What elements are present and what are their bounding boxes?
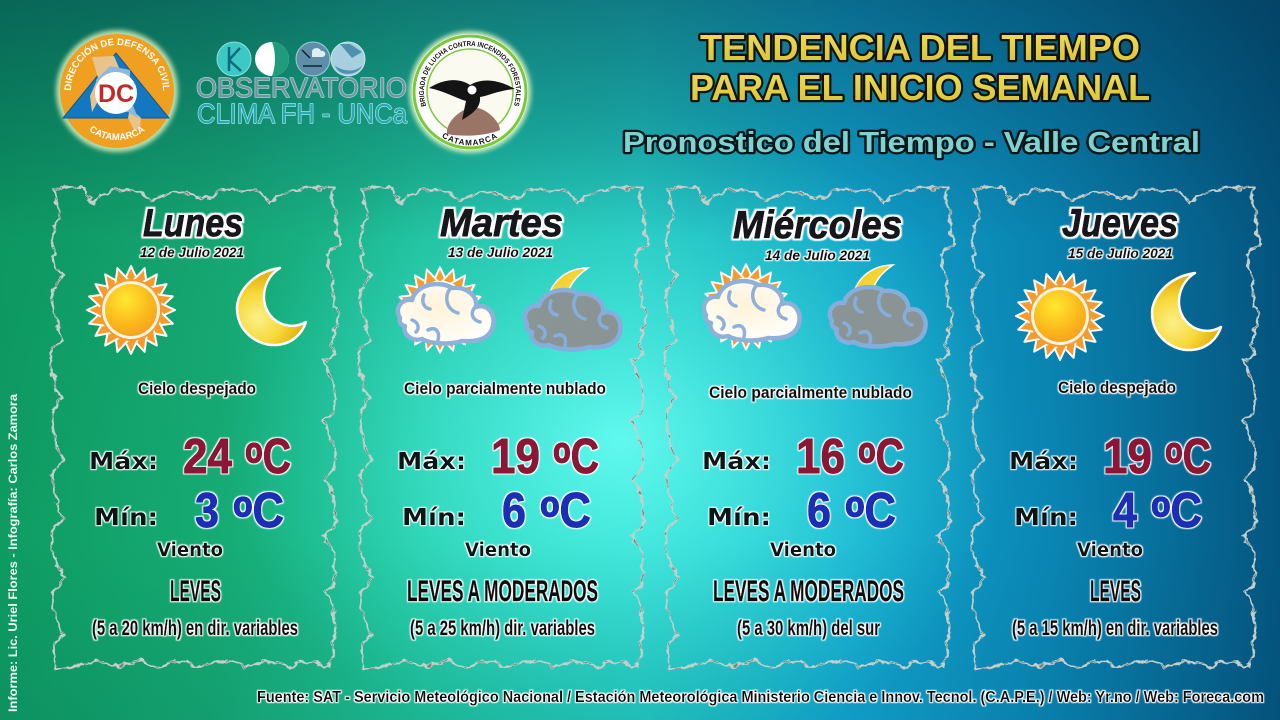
max temperature: 19 [491,430,540,484]
wind detail: (5 a 20 km/h) en dir. variables [92,617,298,640]
subtitle: Pronostico del Tiempo - Valle Central [623,127,1200,159]
date: 13 de Julio 2021 [448,244,553,260]
icon: partly cloudy night [830,265,926,346]
min temperature: 3 [195,484,219,538]
max temperature: º [858,430,876,497]
max temperature: º [1165,430,1183,497]
min temperature: º [540,484,560,551]
min temperature: 4 [1113,484,1137,538]
max temperature: 19 [1103,430,1152,484]
logo: Dirección de Defensa Civil: DC [98,80,134,108]
date: 12 de Julio 2021 [140,244,244,260]
date: 14 de Julio 2021 [765,247,870,263]
logo: Brigada de Lucha contra Incendios Forestales: BRIGADA DE LUCHA CONTRA INCENDIOS FORESTALES [419,41,521,107]
icon: sun [1016,272,1104,360]
title: TENDENCIA DEL TIEMPO [700,27,1140,68]
wind strength: LEVES [1090,575,1141,608]
max temperature: C [571,430,599,484]
max temperature: 16 [796,430,845,484]
min temperature: 6 [807,484,831,538]
panel: Lunes [51,187,340,669]
min temperature: º [845,484,865,551]
logo: Observatorio Clima FH - UNCa: CLIMA FH - UNCa [197,98,407,129]
logo: Dirección de Defensa Civil: DIRECCIÓN DE DEFENSA CIVIL [64,38,170,91]
min label: Mín: [1014,505,1078,531]
min temperature: C [865,484,896,538]
wind strength: LEVES A MODERADOS [713,575,904,608]
max temperature: C [1183,430,1211,484]
max temperature: C [263,430,291,484]
max temperature [183,430,291,497]
max temperature [1103,430,1211,497]
max label: Máx: [702,449,771,475]
logo: Dirección de Defensa Civil: CATAMARCA [90,126,145,140]
wind label: Viento [770,540,836,561]
min temperature: C [560,484,591,538]
sky condition: Cielo despejado [138,379,256,398]
icon: partly cloudy day [703,264,800,350]
logo: Observatorio Clima FH - UNCa [196,42,407,129]
min label: Mín: [94,505,158,531]
min temperature [807,484,896,551]
wind strength: LEVES A MODERADOS [407,575,598,608]
logo: Brigada de Lucha contra Incendios Forestales [406,28,534,156]
wind label: Viento [157,540,223,561]
wind label: Viento [1077,540,1143,561]
max temperature: C [876,430,904,484]
day heading: Martes [440,202,563,245]
logo: Dirección de Defensa Civil [52,26,182,156]
panel: Jueves [971,187,1260,669]
wind label: Viento [465,540,531,561]
max label: Máx: [397,449,466,475]
min temperature: 6 [502,484,526,538]
logo: Brigada de Lucha contra Incendios Forestales: CATAMARCA [442,133,498,146]
max temperature [796,430,904,497]
observatorio wordmark: OBSERVATORIO [196,72,407,103]
min temperature [502,484,591,551]
min temperature [195,484,284,551]
sky condition: Cielo parcialmente nublado [404,379,606,398]
day heading: Miércoles [733,204,902,247]
icon: moon [237,268,306,345]
max temperature: 24 [183,430,232,484]
panel: Miércoles [665,187,954,669]
icon: sun [87,266,175,354]
wind detail: (5 a 25 km/h) dir. variables [410,617,595,640]
min temperature: C [1171,484,1202,538]
wind strength: LEVES [170,575,221,608]
wind detail: (5 a 30 km/h) del sur [737,617,880,640]
max temperature: º [245,430,263,497]
title: PARA EL INICIO SEMANAL [690,67,1150,108]
max temperature [491,430,599,497]
min label: Mín: [402,505,466,531]
icon: partly cloudy day [397,267,494,353]
day heading: Jueves [1062,202,1178,245]
panel: Martes [359,187,648,669]
min temperature [1113,484,1202,551]
max label: Máx: [1009,449,1078,475]
max temperature: º [553,430,571,497]
day heading: Lunes [143,202,243,245]
min label: Mín: [707,505,771,531]
max label: Máx: [89,449,158,475]
sky condition: Cielo parcialmente nublado [709,383,912,402]
icon: moon [1152,273,1221,350]
side credit: Informe: Lic. Uriel Flores - Infografía: Carlos Zamora [6,394,20,712]
min temperature: C [253,484,284,538]
sky condition: Cielo despejado [1058,378,1176,397]
date: 15 de Julio 2021 [1068,245,1173,261]
min temperature: º [1151,484,1171,551]
icon: partly cloudy night [525,268,621,349]
min temperature: º [233,484,253,551]
title [690,27,1150,108]
